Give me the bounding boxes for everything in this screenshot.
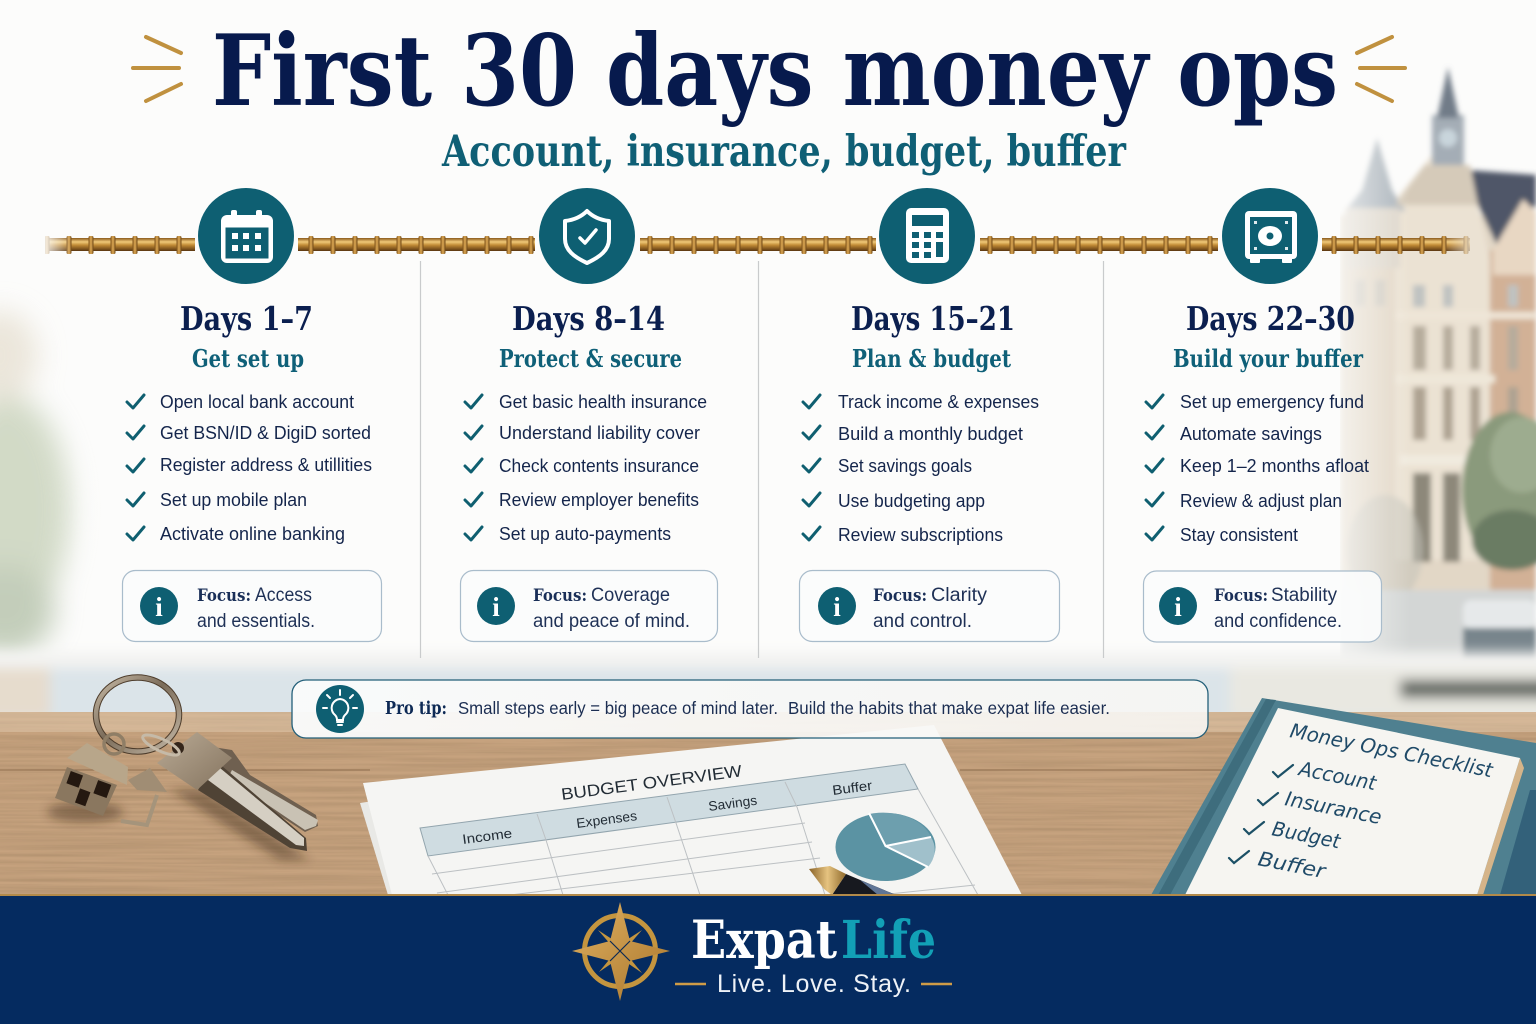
focus callout: i [155,592,163,622]
checklist: Open local bank account [160,391,354,412]
column labels: Savings [707,793,758,814]
rear key [200,745,318,832]
title rays left [133,37,181,101]
footer band [0,894,1536,1024]
budget overview sheet [360,725,1022,895]
budget title: BUDGET OVERVIEW [560,762,743,804]
checklist: Set savings goals [838,455,972,476]
checklist: Understand liability cover [499,422,700,443]
focus callout: and essentials. [197,611,315,632]
column 4: days 22-30 [1144,188,1382,642]
heading days 15-21: Days 15–21 [851,299,1015,338]
focus callout: Coverage [591,585,670,606]
subtitle: Account, insurance, budget, buffer [441,127,1127,177]
checklist: Build a monthly budget [838,423,1023,444]
blurred background: building on the right [1340,67,1536,665]
column 3: days 15-21 [800,188,1060,642]
focus callout: and control. [873,611,972,632]
checklist: Track income & expenses [838,391,1039,412]
pro tip text: Small steps early = big peace of mind later. [458,698,778,718]
focus callout: and confidence. [1214,611,1342,632]
brand wordmark [691,910,936,971]
focus callout: Focus: [533,586,587,606]
checklist [803,391,1039,545]
building lower haze [1347,495,1423,605]
checklist: Get BSN/ID & DigiD sorted [160,422,371,443]
small link [104,734,124,754]
checklist: Set up emergency fund [1180,391,1364,412]
focus callout: Clarity [931,585,988,606]
checklist: Stay consistent [1180,524,1298,545]
focus callout: Access [255,585,312,606]
column labels [461,778,874,847]
checklist: Activate online banking [160,523,345,544]
focus callout [122,570,382,642]
focus callout: i [492,592,500,622]
key shadows [47,790,310,860]
icon: calendar [198,188,294,284]
checklist: Set up auto-payments [499,523,671,544]
column dividers [420,261,1104,658]
notebook items [1256,756,1384,884]
street tree [1462,412,1536,570]
subheading: Get set up [192,344,304,373]
key ring with house charm and keys [47,678,318,860]
metal ring [96,678,179,752]
house charm [55,743,128,816]
checklist: Automate savings [1180,423,1322,444]
content veil left fade [70,0,140,664]
house charm outline [121,768,167,825]
checklist notebook [1151,698,1536,895]
brass timeline rod [45,236,1470,254]
heading days 22-30: Days 22–30 [1186,299,1355,338]
heading days 1-7: Days 1–7 [180,299,313,338]
compass logo [572,902,670,1001]
column labels: Expenses [575,808,638,831]
checklist: Keep 1–2 months afloat [1180,455,1369,476]
title: First 30 days money ops [212,14,1338,129]
notebook title: Money Ops Checklist [1288,718,1496,782]
focus callout: Focus: [197,586,251,606]
tagline: Live. Love. Stay. [717,970,911,998]
brand wordmark: Life [841,910,936,971]
column labels: Buffer [831,778,874,798]
checklist: Set up mobile plan [160,489,307,510]
focus callout: Focus: [873,586,927,606]
brand wordmark: Expat [691,910,837,971]
heading days 8-14: Days 8–14 [512,299,665,338]
focus callout: Focus: [1214,586,1268,606]
notebook items: Insurance [1283,786,1384,829]
column labels: Income [461,826,513,847]
notebook items: Budget [1270,816,1343,854]
icon: safe [1222,188,1318,284]
pro tip text continued: Build the habits that make expat life easier. [788,698,1110,718]
pen [809,866,896,895]
notebook checks [1229,765,1293,863]
focus callout [800,570,1060,642]
front key [140,731,307,851]
subheading: Plan & budget [852,344,1011,373]
focus callout [460,570,718,642]
blurred water strip [0,652,1536,724]
content veil [140,0,1340,664]
blurred background: trees on the left [0,310,70,655]
checklist: Register address & utillities [160,454,372,475]
pro tip label: Pro tip: [385,699,447,719]
icon: light bulb [316,685,364,733]
focus callout: Stability [1271,585,1337,606]
notebook items: Buffer [1256,846,1329,884]
building windows [1355,280,1535,562]
focus callout: i [1174,592,1182,622]
content veil right fade [1340,0,1410,664]
table header [420,764,918,856]
checklist [465,391,707,544]
subheading: Build your buffer [1173,344,1363,373]
pie chart [836,813,936,881]
focus callout: i [833,592,841,622]
checklist: Review employer benefits [499,489,699,510]
notebook items: Account [1295,756,1379,795]
parked car [1463,600,1536,660]
subheading: Protect & secure [499,344,682,373]
pro tip bar [292,680,1208,738]
checklist: Review & adjust plan [1180,490,1342,511]
icon: calculator [879,188,975,284]
checklist [127,391,372,544]
column 1: days 1-7 [122,188,382,642]
column 2: days 8-14 [460,188,718,642]
checklist: Check contents insurance [499,455,699,476]
checklist: Use budgeting app [838,490,985,511]
checklist [1146,391,1369,545]
checklist: Review subscriptions [838,524,1003,545]
checklist: Get basic health insurance [499,391,707,412]
title rays right [1357,37,1405,101]
icon: shield [539,188,635,284]
focus callout: and peace of mind. [533,611,690,632]
table lines [428,782,978,895]
focus callout [1144,571,1382,642]
wooden table [0,712,1536,896]
